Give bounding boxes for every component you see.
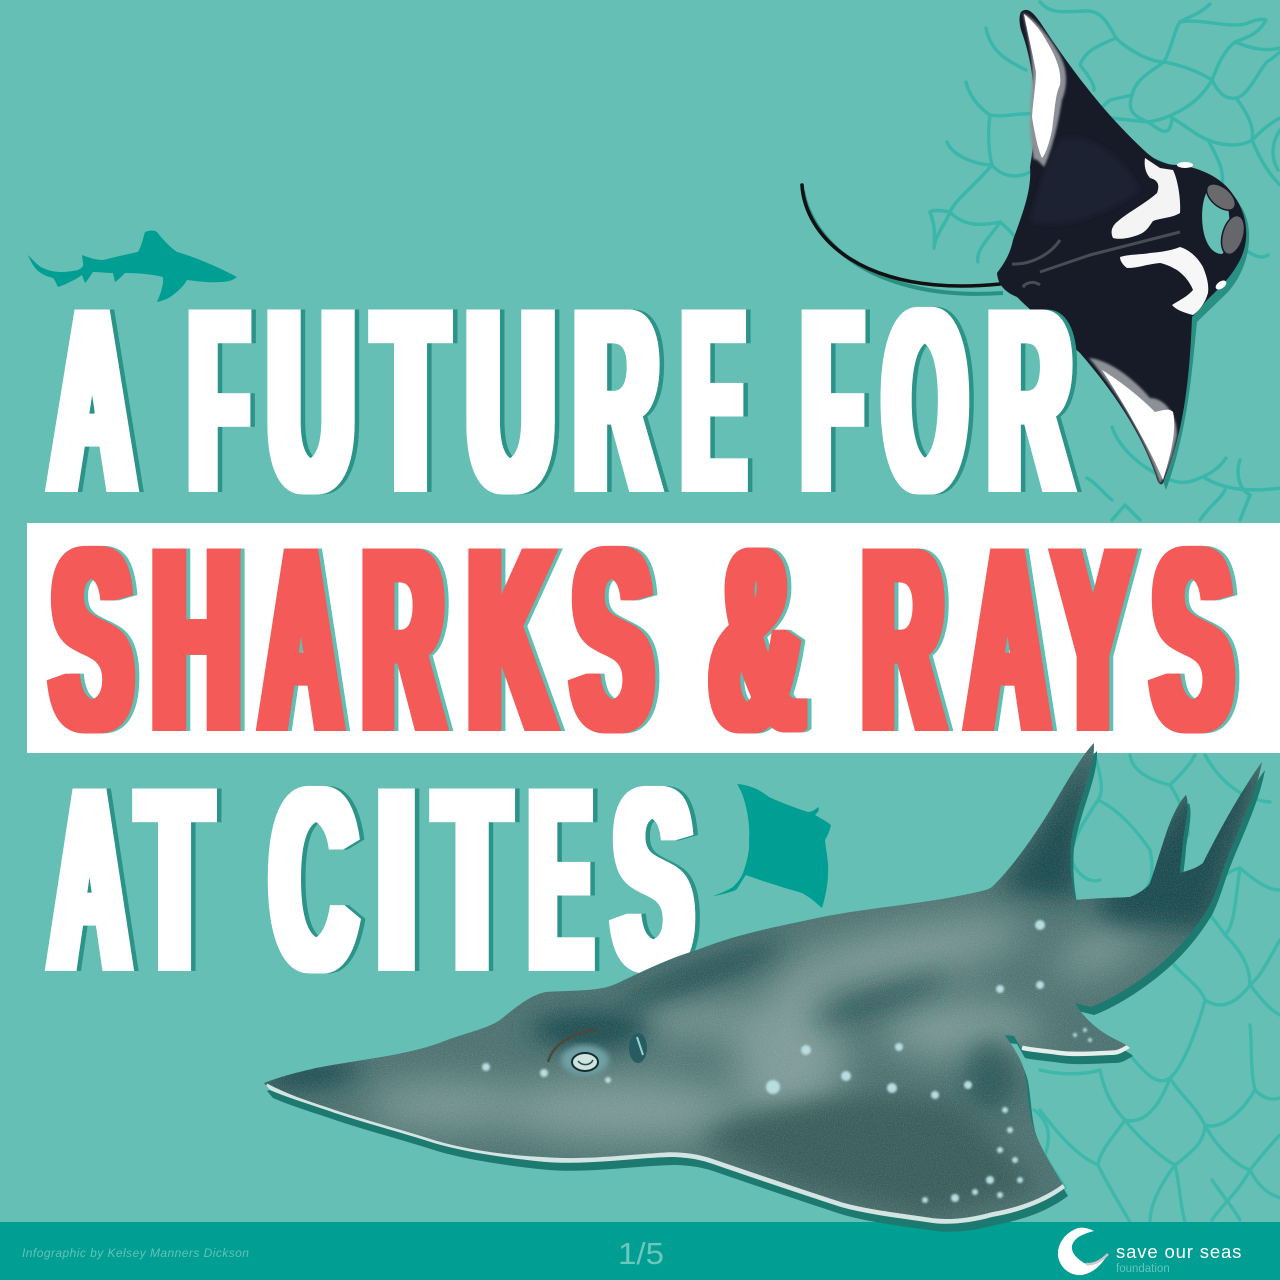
manta white patch: lower — [1120, 247, 1208, 315]
title line: AT CITES: C — [271, 734, 356, 1024]
manta midline — [1012, 232, 1180, 286]
manta ray illustration — [802, 10, 1249, 490]
title line: SHARKS & RAYS: A — [968, 494, 1048, 784]
title line: A FUTURE FOR: F — [190, 256, 247, 544]
title line: SHARKS & RAYS: R — [363, 494, 443, 784]
pectoral fin shade — [700, 1096, 1040, 1215]
guitarfish illustration — [250, 740, 1280, 1240]
title line: A FUTURE FOR: E — [684, 256, 744, 544]
title line: A FUTURE FOR: F — [803, 256, 861, 544]
manta white patch: upper — [1112, 158, 1180, 239]
water caustic pattern: under manta wing — [1087, 427, 1280, 520]
logo name: save our seas — [1116, 1241, 1242, 1262]
text: S — [614, 734, 692, 1024]
manta tail — [803, 191, 1003, 294]
guitarfish body — [250, 740, 1280, 1240]
title line: A FUTURE FOR: O — [884, 256, 966, 544]
manta white wing tip: lower — [1089, 358, 1177, 484]
title line: SHARKS & RAYS: K — [469, 494, 553, 784]
guitarfish spots — [482, 920, 1092, 1203]
title line: SHARKS & RAYS: R — [863, 494, 943, 784]
logo swoosh — [1058, 1228, 1108, 1275]
manta cephalic lobes — [1202, 179, 1240, 215]
skin grain — [250, 740, 1280, 1240]
guitarfish shadow — [267, 751, 1265, 1232]
icon: small shark silhouette — [28, 230, 237, 302]
title line: AT CITES: T — [139, 734, 210, 1024]
title line: A FUTURE FOR: U — [268, 256, 354, 544]
title line: SHARKS & RAYS: Y — [1055, 494, 1131, 784]
guitarfish white fringe — [266, 1086, 1065, 1222]
text: R — [989, 256, 1071, 544]
title line: A FUTURE FOR: A — [50, 256, 132, 544]
manta body — [997, 10, 1246, 484]
title band: white — [27, 523, 1280, 753]
body dark blotches — [259, 743, 1262, 1111]
title line: A FUTURE FOR: U — [467, 256, 554, 544]
water caustic pattern: bottom right — [1034, 755, 1280, 1222]
credit text: Infographic by Kelsey Manners Dickson — [22, 1246, 249, 1260]
manta shadow — [1003, 14, 1249, 490]
title line: AT CITES: A — [50, 734, 128, 1024]
title line: SHARKS & RAYS: & — [710, 494, 803, 784]
manta white wing tip: upper — [1023, 13, 1066, 167]
title line: A FUTURE FOR: T — [375, 256, 446, 544]
bottom bar — [0, 1222, 1280, 1280]
body light blotches — [365, 903, 1153, 1142]
page number: 1/5 — [618, 1236, 664, 1271]
title line: SHARKS & RAYS: S — [52, 494, 132, 784]
title line: SHARKS & RAYS: H — [152, 494, 241, 784]
manta mouth opening — [1202, 189, 1230, 254]
logo swoosh tail — [1086, 1254, 1108, 1264]
manta highlight — [1030, 137, 1140, 224]
title line: A FUTURE FOR: R — [575, 256, 658, 544]
logo subline: foundation — [1116, 1263, 1170, 1275]
title line: SHARKS & RAYS: S — [573, 494, 652, 784]
guitarfish spiracle — [629, 1033, 647, 1063]
guitarfish eye — [548, 1030, 647, 1075]
icon: small manta silhouette — [713, 784, 831, 908]
manta eyes — [1177, 162, 1193, 168]
title line: AT CITES: E — [530, 734, 590, 1024]
water caustic pattern: top right — [930, 2, 1280, 262]
title line: SHARKS & RAYS: A — [262, 494, 340, 784]
title line: AT CITES: T — [436, 734, 508, 1024]
logo: Save Our Seas foundation — [1058, 1228, 1242, 1275]
title line: AT CITES: I — [377, 734, 416, 1024]
